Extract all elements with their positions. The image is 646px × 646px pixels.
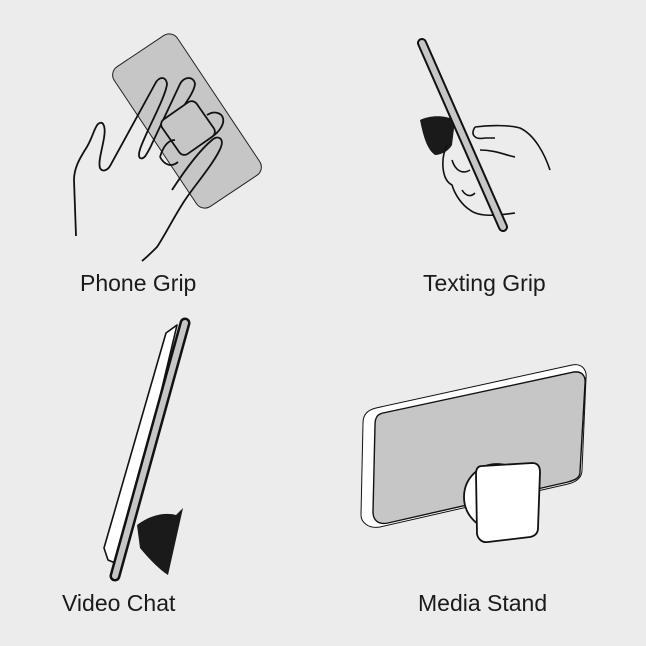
label: media stand: Media Stand (418, 590, 547, 616)
label: phone grip: Phone Grip (80, 270, 196, 296)
outer phone (361, 365, 586, 527)
hand outline (74, 78, 195, 236)
grip square (159, 99, 217, 157)
gray screen (373, 372, 585, 523)
grip circle (464, 464, 530, 530)
panel: texting grip (420, 43, 550, 227)
panel: media stand (361, 365, 586, 542)
label: video chat: Video Chat (62, 590, 176, 616)
black stand (137, 508, 183, 575)
panel: phone grip (74, 30, 265, 261)
grip square (476, 463, 540, 542)
grip black (420, 116, 455, 155)
pinky and palm edge (142, 138, 222, 261)
back panel (104, 325, 177, 565)
phone side bar (422, 43, 503, 227)
hand (443, 126, 550, 215)
ring finger (160, 113, 223, 165)
panel: video chat (104, 323, 185, 576)
phone bar (115, 323, 185, 576)
label: texting grip: Texting Grip (423, 270, 546, 296)
phone rotated (109, 30, 265, 212)
